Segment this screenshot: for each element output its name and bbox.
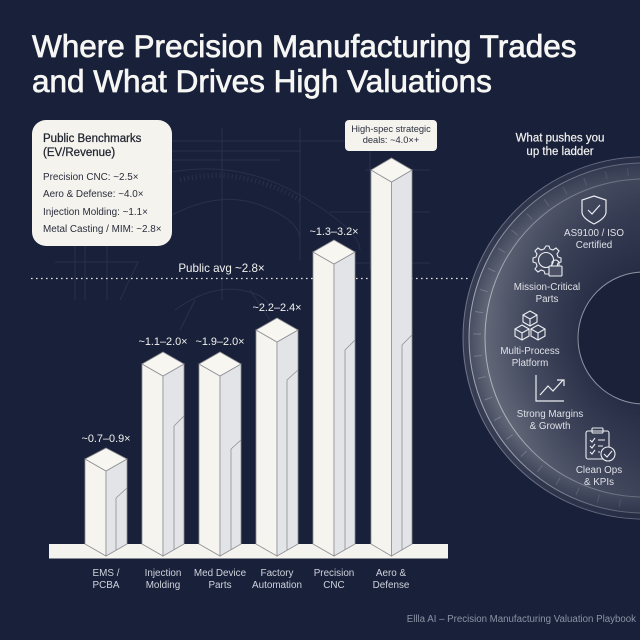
panel: public benchmarks — [32, 120, 172, 246]
callout: high-spec deals: deals: ~4.0×+ — [363, 135, 419, 145]
panel: public benchmarks: Metal Casting / MIM: ~2.8× — [43, 224, 162, 235]
title: Where Precision Manufacturing Trades — [32, 28, 576, 64]
category labels: Molding — [146, 580, 180, 591]
title: and What Drives High Valuations — [32, 62, 492, 98]
heading: what pushes you: up the ladder — [526, 146, 594, 158]
label: mission-critical: Parts — [536, 294, 559, 305]
callout: high-spec deals — [345, 120, 437, 151]
bar: Factory Automation: ~2.2–2.4× — [252, 302, 302, 314]
category labels: Injection — [145, 568, 181, 579]
icon: growth chart — [536, 375, 564, 401]
callout: high-spec deals: High-spec strategic — [351, 124, 431, 134]
bar: Aero & Defense — [371, 158, 412, 556]
icon: clipboard check — [586, 428, 615, 461]
category labels: Automation — [252, 580, 302, 591]
label: multi-process: Platform — [512, 358, 548, 369]
bar: Med Device Parts — [195, 336, 245, 556]
category labels: EMS / — [93, 568, 120, 579]
label: clean ops: & KPIs — [584, 477, 614, 488]
bar: EMS / PCBA: ~0.7–0.9× — [81, 433, 131, 445]
category labels — [93, 568, 410, 591]
category labels: Factory — [261, 568, 294, 579]
category labels: Parts — [208, 580, 232, 591]
panel: public benchmarks: Aero & Defense: ~4.0× — [43, 189, 143, 200]
label: certified: Certified — [576, 240, 612, 251]
panel: public benchmarks: Precision CNC: ~2.5× — [43, 172, 139, 183]
bar: Precision CNC: ~1.3–3.2× — [309, 226, 359, 238]
public average line: Public avg ~2.8× — [178, 262, 265, 275]
bar: EMS / PCBA — [81, 433, 131, 556]
panel: public benchmarks: Public Benchmarks — [43, 133, 141, 145]
label: margins: Strong Margins — [517, 409, 583, 420]
bar: Factory Automation — [252, 302, 302, 556]
category labels: PCBA — [93, 580, 120, 591]
label: mission-critical: Mission-Critical — [514, 282, 580, 293]
bar: Precision CNC — [309, 226, 359, 556]
icon: cubes — [515, 311, 545, 340]
category labels: Aero & — [376, 568, 407, 579]
category labels: CNC — [323, 580, 345, 591]
category labels: Precision — [314, 568, 354, 579]
panel: public benchmarks: Injection Molding: ~1.1× — [43, 207, 148, 218]
chart base — [49, 544, 448, 558]
bar: Med Device Parts: ~1.9–2.0× — [195, 336, 245, 348]
category labels: Defense — [373, 580, 410, 591]
title — [32, 28, 576, 99]
label: multi-process: Multi-Process — [500, 346, 560, 357]
bar: Injection Molding: ~1.1–2.0× — [138, 336, 188, 348]
bar: Injection Molding — [138, 336, 188, 556]
label: certified: AS9100 / ISO — [564, 228, 624, 239]
icon: gear and lock — [533, 246, 562, 276]
label: clean ops: Clean Ops — [576, 465, 622, 476]
heading: what pushes you: What pushes you — [516, 132, 604, 144]
panel: public benchmarks: (EV/Revenue) — [43, 147, 115, 159]
label: margins: & Growth — [530, 421, 570, 432]
footer: Ellla AI – Precision Manufacturing Valuation Playbook — [407, 614, 636, 625]
icon: shield — [582, 196, 606, 224]
category labels: Med Device — [194, 568, 247, 579]
